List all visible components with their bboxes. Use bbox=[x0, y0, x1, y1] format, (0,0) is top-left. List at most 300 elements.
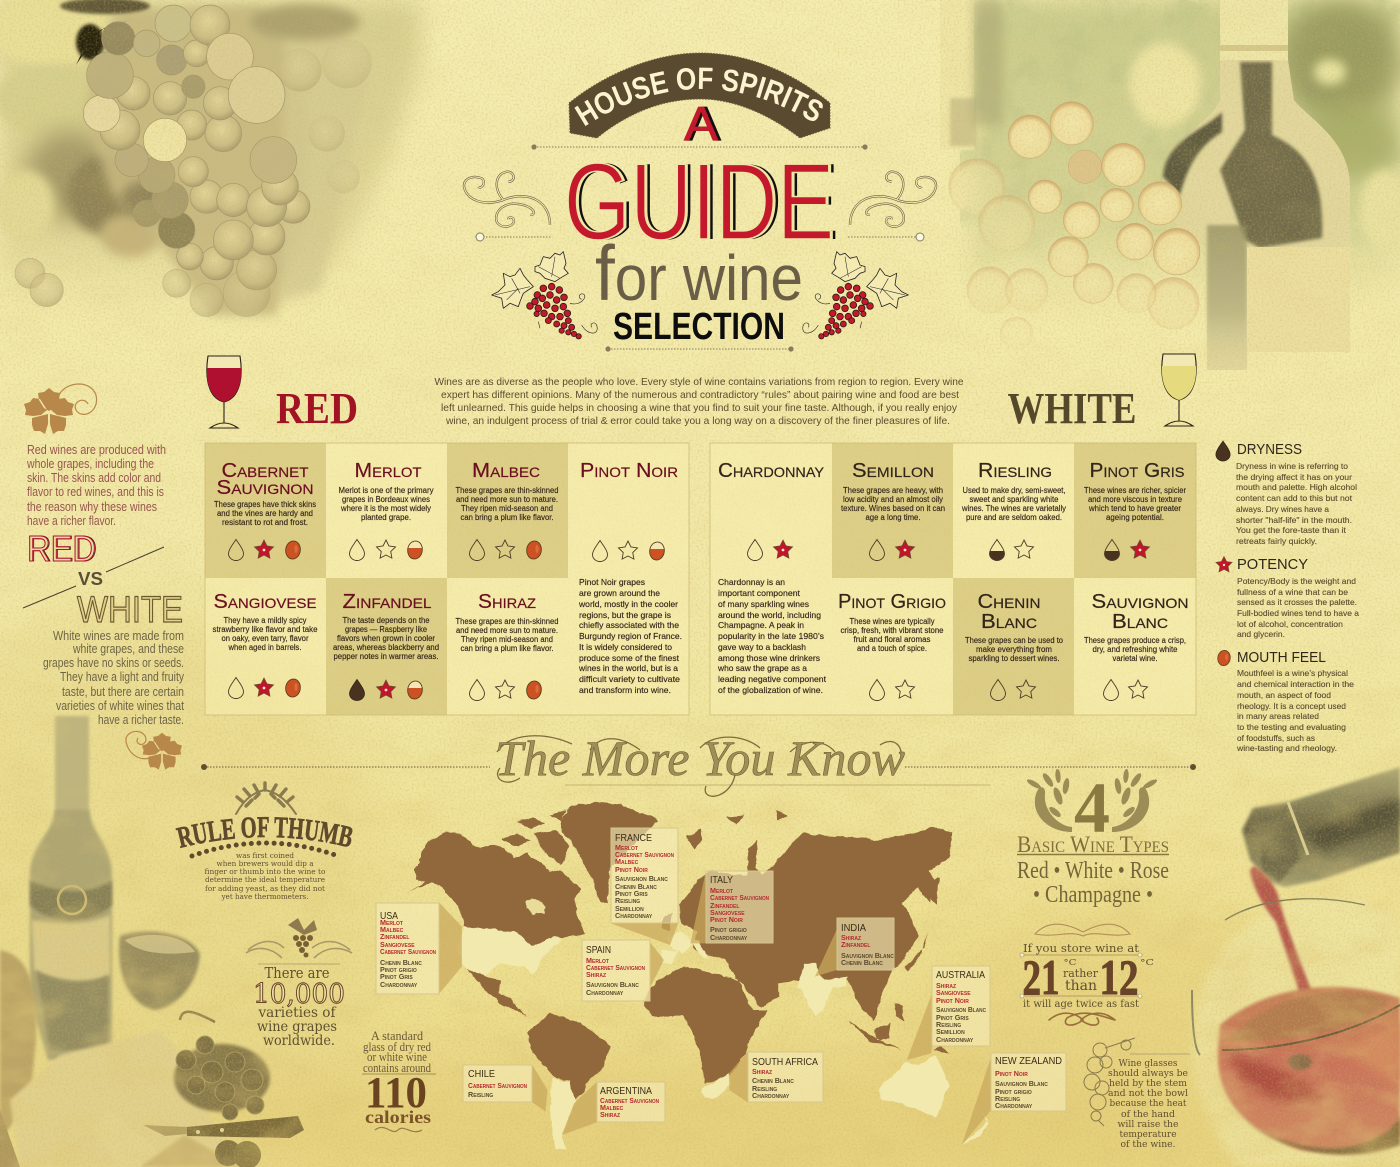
callout: South Africa: SOUTH AFRICA bbox=[752, 1056, 818, 1068]
intro paragraph: left unlearned. This guide helps in choosing a wine that you find to suit your fine taste. Although, if you really enjoy bbox=[441, 402, 958, 414]
card: Chenin Blanc: make everything from bbox=[976, 645, 1052, 654]
fact: store wine temperature: 21 bbox=[1022, 949, 1060, 1005]
card: Chardonnay: leading negative component bbox=[718, 674, 827, 684]
legend: potency bbox=[1216, 556, 1359, 639]
callout: Italy: Sangiovese bbox=[710, 908, 745, 917]
white wine description: grapes have no skins or seeds. bbox=[43, 656, 184, 670]
card: Chardonnay bbox=[717, 460, 827, 695]
callout: Australia: Chardonnay bbox=[936, 1035, 974, 1044]
title: A GUIDE for wine SELECTION: for wine bbox=[595, 229, 803, 317]
callout: New Zealand: NEW ZEALAND bbox=[995, 1055, 1062, 1067]
card: Sauvignon Blanc bbox=[1084, 591, 1188, 700]
fact: wine glasses bbox=[1084, 1038, 1190, 1150]
fact: 110 calories: glass of dry red bbox=[363, 1040, 432, 1054]
legend: mouth feel: Mouthfeel is a wine’s physical bbox=[1237, 668, 1348, 678]
title: A GUIDE for wine SELECTION: GUIDE bbox=[566, 141, 836, 263]
card: Sangiovese: They have a mildly spicy bbox=[224, 616, 306, 625]
fact: 110 calories: or white wine bbox=[367, 1050, 427, 1064]
card: Merlot: planted grape. bbox=[361, 513, 411, 522]
fact: Rule of Thumb: yet have thermometers. bbox=[221, 892, 308, 901]
fact: 10,000 varieties bbox=[246, 918, 352, 1049]
card: Zinfandel: grapes — Raspberry like bbox=[345, 625, 428, 634]
callout: Chile: CHILE bbox=[468, 1068, 495, 1080]
card: Cabernet Sauvignon bbox=[214, 460, 316, 560]
callout: Argentina: Cabernet Sauvignon bbox=[600, 1096, 659, 1105]
callout: Spain: Cabernet Sauvignon bbox=[586, 963, 645, 972]
red wine description: whole grapes, including the bbox=[26, 457, 154, 471]
photo: bottle, foliage and white grapes top right bbox=[940, 0, 1400, 370]
legend: mouth feel: of foodstuffs, such as bbox=[1237, 733, 1315, 743]
fact: 110 calories: 110 bbox=[365, 1068, 427, 1117]
RED vs WHITE lockup: RED bbox=[27, 528, 96, 569]
card: Pinot Noir bbox=[578, 460, 682, 695]
card: Chardonnay: Chardonnay is an bbox=[718, 577, 785, 587]
title: A GUIDE for wine SELECTION: A bbox=[684, 98, 718, 151]
fact: wine glasses: Wine glasses bbox=[1118, 1058, 1178, 1069]
card: Riesling: wines. The wines are varietally bbox=[961, 504, 1066, 513]
fact: store wine temperature: °C bbox=[1140, 958, 1154, 967]
grid background bbox=[710, 443, 1196, 715]
fact: 10,000 varieties: wine grapes bbox=[257, 1019, 337, 1035]
card: Cabernet Sauvignon: and the vines are hardy and bbox=[217, 509, 313, 518]
callout: India: Sauvignon Blanc bbox=[841, 951, 894, 960]
card: Pinot Noir: world, mostly in the cooler bbox=[578, 599, 678, 609]
callout: Australia: Sangiovese bbox=[936, 988, 971, 997]
fact: 10,000 varieties: There are bbox=[264, 964, 330, 982]
section heading: The More You Know: The More You Know bbox=[495, 730, 905, 786]
callout: USA: Cabernet Sauvignon bbox=[380, 947, 436, 956]
card: Chardonnay: of the globalization of wine. bbox=[718, 685, 823, 695]
card: Pinot Noir: Pinot Noir bbox=[580, 460, 678, 482]
callout: Spain: Sauvignon Blanc bbox=[586, 980, 639, 989]
callout: India: Chenin Blanc bbox=[841, 958, 883, 967]
callout: USA bbox=[376, 903, 439, 994]
callout: USA: Sangiovese bbox=[380, 940, 415, 949]
card: Semillon: low acidity and an almost oily bbox=[843, 495, 943, 504]
card: Chardonnay: Champagne. A peak in bbox=[718, 620, 804, 630]
card: Pinot Grigio: These wines are typically bbox=[850, 617, 934, 626]
fact: Rule of Thumb: was first coined bbox=[236, 851, 294, 860]
flourish left bbox=[464, 172, 550, 227]
callout: Australia: Semillion bbox=[936, 1027, 965, 1036]
card: Pinot Gris: and more viscous in texture bbox=[1088, 495, 1183, 504]
card: Sauvignon Blanc: Blanc bbox=[1112, 611, 1168, 633]
fact: 10,000 varieties: varieties of bbox=[258, 1005, 337, 1021]
legend: potency: Potency/Body is the weight and bbox=[1237, 576, 1356, 586]
callout: France: Chenin Blanc bbox=[615, 882, 657, 891]
callout: South Africa: Chardonnay bbox=[752, 1091, 790, 1100]
callout: Argentina: Malbec bbox=[600, 1103, 624, 1112]
callout: Italy: ITALY bbox=[710, 874, 733, 886]
white wine description: taste, but there are certain bbox=[62, 685, 184, 699]
callout: Argentina: ARGENTINA bbox=[600, 1085, 652, 1097]
banner: House of Spirits: HOUSE OF SPIRITS bbox=[574, 68, 823, 126]
intro paragraph: expert has different opinions. Many of the numerous and contradictory “rules” about pairing wine and food are best bbox=[441, 389, 959, 401]
fact: store wine temperature: it will age twice as fast bbox=[1023, 998, 1140, 1010]
card: Pinot Noir: chiefly associated with the bbox=[579, 620, 679, 630]
fact: 10,000 varieties: 10,000 bbox=[253, 979, 345, 1010]
intro paragraph: Wines are as diverse as the people who love. Every style of wine contains variations from region to region. Every wine bbox=[434, 376, 964, 388]
white wine description: White wines are made from bbox=[53, 629, 184, 643]
card: Pinot Gris bbox=[1084, 460, 1186, 560]
callout: USA: Pinot grigio bbox=[380, 965, 417, 974]
legend: dryness: always. Dry wines have a bbox=[1236, 504, 1329, 514]
legend: dryness: the drying affect it has on your bbox=[1236, 472, 1352, 482]
legend: potency: fullness of a wine that can be bbox=[1237, 587, 1348, 597]
card: Chardonnay: popularity in the late 1980’s bbox=[718, 631, 824, 641]
map: callout connectors bbox=[439, 871, 991, 1145]
legend: mouth feel: rheology. It is a concept used bbox=[1237, 701, 1346, 711]
callout: Chile bbox=[463, 1065, 532, 1102]
intro paragraph bbox=[434, 376, 964, 427]
card: Merlot: Merlot is one of the primary bbox=[338, 486, 434, 495]
card: Cabernet Sauvignon: These grapes have thick skins bbox=[214, 500, 316, 509]
legend: dryness: mouth and palette. High alcohol bbox=[1236, 482, 1357, 492]
fact: 4 basic wine types bbox=[1017, 768, 1169, 908]
title: A GUIDE for wine SELECTION bbox=[564, 98, 839, 348]
fact: 10,000 varieties: worldwide. bbox=[263, 1033, 335, 1049]
card: Pinot Grigio: fruit and floral aromas bbox=[854, 635, 930, 644]
callout: South Africa: Reisling bbox=[752, 1084, 777, 1093]
card: Shiraz: and need more sun to mature. bbox=[456, 626, 558, 635]
icon: leaf and swirl top bbox=[24, 384, 97, 434]
fact: wine glasses: of the wine. bbox=[1120, 1139, 1176, 1150]
callout: India: INDIA bbox=[841, 922, 866, 934]
panel: white wines grid bbox=[710, 443, 1196, 715]
fact: Rule of Thumb: finger or thumb into the wine to bbox=[204, 867, 326, 876]
red wine description: skin. The skins add color and bbox=[27, 471, 161, 485]
card: Semillon: texture. Wines based on it can bbox=[841, 504, 945, 513]
card: Pinot Grigio bbox=[838, 591, 946, 700]
callout: USA: Malbec bbox=[380, 925, 404, 934]
card: Pinot Grigio: Pinot Grigio bbox=[838, 591, 946, 613]
legend: potency: POTENCY bbox=[1237, 556, 1308, 573]
card: Pinot Noir: are grown around the bbox=[579, 588, 660, 598]
card: Shiraz: They ripen mid-season and bbox=[461, 635, 553, 644]
callout: Australia: Reisling bbox=[936, 1020, 961, 1029]
card: Sauvignon Blanc: dry, and refreshing white bbox=[1092, 645, 1178, 654]
callout: France: Cabernet Sauvignon bbox=[615, 850, 674, 859]
card: Pinot Noir: produce some of the finest bbox=[579, 653, 680, 663]
card: Chenin Blanc bbox=[965, 591, 1064, 700]
card: Pinot Noir: Burgundy region of France. bbox=[579, 631, 682, 641]
fact: wine glasses: because the heat bbox=[1110, 1098, 1187, 1109]
legend: dryness: You get the fore-taste than it bbox=[1236, 525, 1347, 535]
fact: 110 calories: A standard bbox=[371, 1029, 424, 1043]
card: Malbec: Malbec bbox=[472, 460, 540, 482]
card: Chardonnay: of many sparkling wines bbox=[718, 599, 809, 609]
card: Semillon: Semillon bbox=[852, 460, 934, 482]
card: Zinfandel: flavors when grown in cooler bbox=[337, 634, 435, 643]
callout: New Zealand: Sauvignon Blanc bbox=[995, 1079, 1048, 1088]
card: Chenin Blanc: Blanc bbox=[981, 611, 1037, 633]
world map bbox=[376, 802, 1066, 1150]
fact: 4 basic wine types: Basic Wine Types bbox=[1017, 832, 1169, 857]
card: Malbec: These grapes are thin-skinned bbox=[456, 486, 558, 495]
card: Zinfandel bbox=[333, 591, 439, 700]
card: Semillon: age a long time. bbox=[866, 513, 920, 522]
card: Shiraz: These grapes are thin-skinned bbox=[456, 617, 558, 626]
fact: store wine temperature: rather bbox=[1063, 967, 1099, 980]
card: Chardonnay: important component bbox=[718, 588, 801, 598]
card: Chenin Blanc: sparkling to dessert wines. bbox=[968, 654, 1060, 663]
icon: grapes left bbox=[492, 252, 597, 339]
legend: dryness: content can add to this but not bbox=[1236, 493, 1353, 503]
callout: New Zealand bbox=[991, 1053, 1066, 1111]
callout: Italy: Pinot Noir bbox=[710, 915, 743, 924]
legend: mouth feel: in many areas related bbox=[1237, 711, 1319, 721]
photo: pouring bottle and red wine glass bottom right bbox=[1192, 767, 1400, 1167]
fact: wine glasses: held by the stem bbox=[1109, 1078, 1187, 1089]
white wine description: white grapes, and these bbox=[72, 642, 184, 656]
legend: dryness: Dryness in wine is referring to bbox=[1236, 461, 1348, 471]
legend: dryness bbox=[1216, 441, 1357, 546]
card: Chardonnay: among those wine drinkers bbox=[718, 653, 820, 663]
callout: Australia: AUSTRALIA bbox=[936, 969, 985, 981]
card: Cabernet Sauvignon: Cabernet bbox=[222, 460, 309, 482]
callout: France: Semillion bbox=[615, 904, 644, 913]
callout: South Africa: Shiraz bbox=[752, 1067, 772, 1076]
panel: red wines grid bbox=[205, 443, 689, 715]
card: Pinot Gris: Pinot Gris bbox=[1090, 460, 1184, 482]
callout: USA: USA bbox=[380, 910, 398, 922]
card: Semillon bbox=[841, 460, 945, 560]
callout: France: Reisling bbox=[615, 896, 640, 905]
fact: wine glasses: temperature bbox=[1120, 1129, 1177, 1140]
RED vs WHITE lockup: WHITE bbox=[77, 589, 183, 630]
callout: France: Sauvignon Blanc bbox=[615, 874, 668, 883]
legend: potency: and glycerin. bbox=[1237, 629, 1285, 639]
card: Pinot Noir: and transform into wine. bbox=[579, 685, 671, 695]
callout: New Zealand: Reisling bbox=[995, 1094, 1020, 1103]
callout: France: Pinot Gris bbox=[615, 889, 648, 898]
heading: WHITE: WHITE bbox=[1008, 384, 1136, 433]
legend: mouth feel: to the testing and evaluating bbox=[1237, 722, 1346, 732]
map: brown landmasses bbox=[406, 802, 952, 1100]
callout: India: Zinfandel bbox=[841, 940, 870, 949]
card: Sangiovese: on oaky, even tarry, flavor bbox=[222, 634, 309, 643]
card: Chenin Blanc: These grapes can be used to bbox=[965, 636, 1064, 645]
card: Chardonnay: Chardonnay bbox=[718, 460, 825, 482]
grid background bbox=[205, 443, 689, 715]
card: Merlot: Merlot bbox=[354, 460, 422, 482]
callout: Italy: Pinot grigio bbox=[710, 925, 747, 934]
card: Sangiovese: strawberry like flavor and take bbox=[212, 625, 318, 634]
icon: red wine glass bbox=[207, 356, 241, 428]
callout: Spain: SPAIN bbox=[586, 944, 611, 956]
callout: South Africa: Chenin Blanc bbox=[752, 1076, 794, 1085]
icon: leaf and swirl bottom bbox=[126, 731, 182, 770]
callout: Spain bbox=[582, 940, 650, 1001]
callout: Australia: Sauvignon Blanc bbox=[936, 1005, 986, 1014]
fact: Rule of Thumb: RULE OF THUMB bbox=[176, 816, 352, 848]
callout: France: Merlot bbox=[615, 843, 638, 852]
card: Pinot Noir: Pinot Noir grapes bbox=[579, 577, 645, 587]
card: Sangiovese: Sangiovese bbox=[214, 591, 316, 613]
callout: USA: Chenin Blanc bbox=[380, 958, 422, 967]
callout: Australia bbox=[932, 966, 990, 1046]
callout: Argentina bbox=[597, 1082, 665, 1122]
callout: India: Shiraz bbox=[841, 933, 861, 942]
fact: 110 calories bbox=[362, 1029, 436, 1132]
card: Pinot Gris: ageing potential. bbox=[1106, 513, 1164, 522]
legend: potency: lot of alcohol, concentration bbox=[1237, 619, 1343, 629]
legend: dryness: DRYNESS bbox=[1237, 441, 1302, 458]
card: Chardonnay: around the world, including bbox=[718, 610, 821, 620]
fact: store wine temperature bbox=[1020, 924, 1154, 1025]
RED vs WHITE lockup bbox=[23, 528, 183, 630]
icon: white wine glass bbox=[1162, 354, 1196, 426]
callout: France: Chardonnay bbox=[615, 911, 653, 920]
title dotted rules bbox=[476, 144, 924, 352]
fact: wine glasses: and not the bowl bbox=[1108, 1088, 1188, 1099]
RED vs WHITE lockup: RED bbox=[28, 528, 97, 569]
callout: Australia: Pinot Gris bbox=[936, 1013, 969, 1022]
fact: 4 basic wine types: 4 bbox=[1074, 768, 1110, 848]
fact: store wine temperature: than bbox=[1065, 978, 1097, 994]
card: Pinot Noir: It is widely considered to bbox=[579, 642, 672, 652]
fact: wine glasses: should always be bbox=[1108, 1068, 1188, 1079]
card: Riesling: sweet and sparkling white bbox=[970, 495, 1059, 504]
card: Malbec: can bring a plum like flavor. bbox=[460, 513, 554, 522]
red wine description: Red wines are produced with bbox=[27, 443, 166, 457]
card: Pinot Grigio: crisp, fresh, with vibrant stone bbox=[840, 626, 944, 635]
card: Pinot Gris: which tend to have greater bbox=[1088, 504, 1181, 513]
title: A GUIDE for wine SELECTION: SELECTION bbox=[613, 306, 785, 348]
card: Sangiovese bbox=[212, 591, 318, 698]
callout: New Zealand: Pinot grigio bbox=[995, 1087, 1032, 1096]
callout: Argentina: Shiraz bbox=[600, 1110, 620, 1119]
callout: France: FRANCE bbox=[615, 832, 652, 844]
callout: Chile: Reisling bbox=[468, 1090, 493, 1099]
photo: grape cluster top left bbox=[0, 0, 420, 336]
card: Sangiovese: when aged in barrels. bbox=[228, 643, 302, 652]
fact: Rule of Thumb: determine the ideal temperature bbox=[205, 875, 326, 884]
white wine description: varieties of white wines that bbox=[56, 699, 184, 713]
card: Chardonnay: who saw the grape as a bbox=[717, 663, 807, 673]
white wine description: They have a light and fruity bbox=[60, 670, 185, 684]
legend: mouth feel bbox=[1217, 649, 1354, 753]
card: Semillon: These grapes are heavy, with bbox=[843, 486, 943, 495]
legend: dryness: shorter "half-life" in the mouth. bbox=[1236, 515, 1352, 525]
legend: dryness: retreats fairly quickly. bbox=[1236, 536, 1317, 546]
flourish right bbox=[850, 172, 936, 227]
panel: legend bbox=[1216, 441, 1359, 753]
callout: Spain: Chardonnay bbox=[586, 988, 624, 997]
card: Sauvignon Blanc: Sauvignon bbox=[1092, 591, 1188, 613]
title: A GUIDE for wine SELECTION: GUIDE bbox=[569, 141, 839, 263]
card: Shiraz bbox=[456, 591, 558, 700]
callout: New Zealand: Chardonnay bbox=[995, 1101, 1033, 1110]
legend: mouth feel: and chemical interaction in the bbox=[1237, 679, 1354, 689]
callout: USA: Chardonnay bbox=[380, 980, 418, 989]
card: Shiraz: Shiraz bbox=[478, 591, 536, 613]
legend: mouth feel: MOUTH FEEL bbox=[1237, 649, 1326, 666]
card: Zinfandel: areas, whereas blackberry and bbox=[333, 643, 439, 652]
callout: Australia: Pinot Noir bbox=[936, 996, 969, 1005]
red wine description: the reason why these wines bbox=[27, 500, 157, 514]
card: Cabernet Sauvignon: resistant to rot and frost. bbox=[222, 518, 308, 527]
callout: South Africa bbox=[748, 1052, 823, 1102]
callout: USA: Pinot Gris bbox=[380, 972, 413, 981]
title: A GUIDE for wine SELECTION: GUIDE bbox=[564, 141, 834, 263]
card: Shiraz: can bring a plum like flavor. bbox=[460, 644, 554, 653]
red wine description: flavor to red wines, and this is bbox=[27, 485, 164, 499]
card: Riesling bbox=[961, 460, 1066, 560]
card: Sauvignon Blanc: varietal wine. bbox=[1112, 654, 1158, 663]
callout: New Zealand: Pinot Noir bbox=[995, 1069, 1028, 1078]
card: Chardonnay: gave way to a backlash bbox=[718, 642, 806, 652]
callout: France bbox=[611, 828, 678, 923]
card: Malbec: They ripen mid-season and bbox=[461, 504, 553, 513]
fact: wine glasses: will raise the bbox=[1118, 1119, 1179, 1130]
white wine description bbox=[43, 629, 185, 727]
card: Malbec bbox=[456, 460, 558, 560]
intro paragraph: wine, an indulgent process of trial & error could take you a long way on a discovery of the finer pleasures of life. bbox=[445, 415, 950, 427]
photo: bottle, glass, cheese and grapes bottom left bbox=[0, 716, 304, 1167]
card: Merlot: grapes in Bordeaux wines bbox=[342, 495, 430, 504]
card: Chenin Blanc: Chenin bbox=[978, 591, 1040, 613]
fact: store wine temperature: 12 bbox=[1100, 949, 1138, 1005]
fact: store wine temperature: If you store wine at bbox=[1023, 941, 1139, 955]
fact: store wine temperature: °C bbox=[1064, 958, 1076, 967]
callout: USA: Zinfandel bbox=[380, 932, 409, 941]
fact: wine glasses: of the hand bbox=[1121, 1109, 1175, 1120]
card: Riesling: Riesling bbox=[978, 460, 1052, 482]
callout: Italy: Cabernet Sauvignon bbox=[710, 893, 769, 902]
legend: potency: Full-bodied wines tend to have a bbox=[1237, 608, 1359, 618]
card: Zinfandel: The taste depends on the bbox=[342, 616, 430, 625]
callout: USA: Merlot bbox=[380, 918, 403, 927]
legend: mouth feel: wine-tasting and rheology. bbox=[1236, 743, 1337, 753]
callout: France: Malbec bbox=[615, 857, 639, 866]
map: highlighted cream countries bbox=[458, 898, 988, 1150]
callout: Australia: Shiraz bbox=[936, 981, 956, 990]
title: A GUIDE for wine SELECTION: A bbox=[687, 98, 721, 151]
card: Pinot Noir: difficult variety to cultivate bbox=[579, 674, 680, 684]
callout: Italy bbox=[706, 871, 773, 943]
fact: 110 calories: calories bbox=[365, 1107, 431, 1127]
card: Pinot Noir: regions, but the grape is bbox=[579, 610, 671, 620]
callout: India bbox=[837, 918, 894, 970]
callout: Spain: Shiraz bbox=[586, 970, 606, 979]
card: Merlot: where it is the most widely bbox=[340, 504, 431, 513]
RED vs WHITE lockup: VS bbox=[78, 569, 103, 589]
card: Riesling: pure and are seldom oaked. bbox=[966, 513, 1062, 522]
panel: left column red vs white bbox=[23, 384, 185, 770]
card: Zinfandel: pepper notes in warmer areas. bbox=[334, 652, 438, 661]
callout: Spain: Merlot bbox=[586, 956, 609, 965]
red wine description bbox=[26, 443, 166, 528]
section heading: The More You Know bbox=[201, 730, 1196, 796]
callout: Chile: Cabernet Sauvignon bbox=[468, 1081, 527, 1090]
card: Zinfandel: Zinfandel bbox=[342, 591, 432, 613]
fact: Rule of Thumb: when brewers would dip a bbox=[216, 859, 314, 868]
card: Sauvignon Blanc: These grapes produce a crisp, bbox=[1084, 636, 1186, 645]
fact: Rule of Thumb: for adding yeast, as they did not bbox=[205, 884, 325, 893]
card: Pinot Gris: These wines are richer, spicier bbox=[1084, 486, 1186, 495]
callout: France: Pinot Noir bbox=[615, 865, 648, 874]
fact: 4 basic wine types: • Champagne • bbox=[1033, 882, 1153, 908]
card: Pinot Grigio: and a touch of spice. bbox=[857, 644, 927, 653]
card: Pinot Noir: wines in the world, but is a bbox=[578, 663, 678, 673]
icon: grapes right bbox=[803, 252, 908, 339]
fact: 4 basic wine types: Red • White • Rose bbox=[1017, 858, 1169, 884]
red wine description: have a richer flavor. bbox=[27, 514, 116, 528]
card: Riesling: Used to make dry, semi-sweet, bbox=[962, 486, 1066, 495]
heading: RED: RED bbox=[276, 384, 358, 433]
fact: 110 calories: contains around bbox=[363, 1061, 432, 1075]
